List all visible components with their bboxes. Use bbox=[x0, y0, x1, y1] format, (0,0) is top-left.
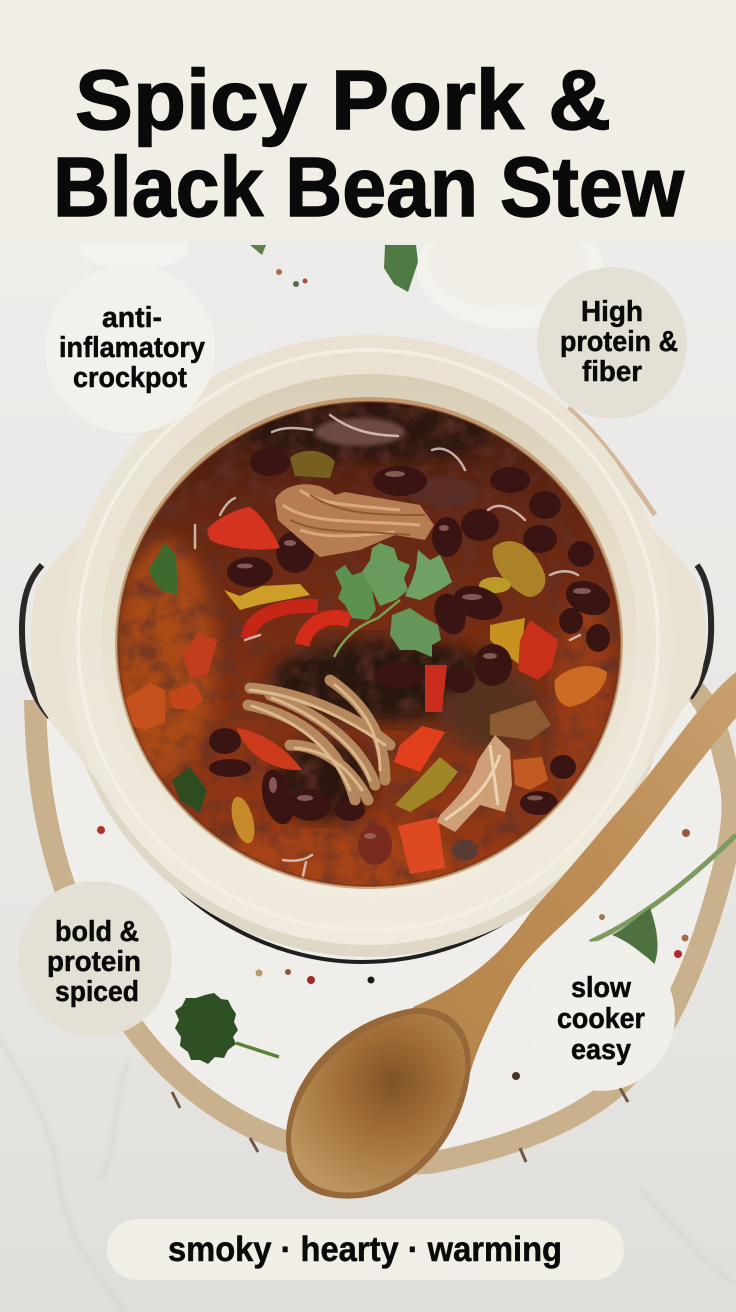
glossy sauce pools bbox=[315, 418, 405, 446]
sauce colour fields bbox=[115, 540, 215, 780]
crockpot bbox=[22, 335, 711, 962]
rim bbox=[63, 335, 673, 945]
shredded pork upper bbox=[275, 484, 434, 557]
badge: slow cooker easy: slow bbox=[571, 972, 631, 1004]
badge: high protein and fiber: fiber bbox=[582, 356, 642, 388]
title line 2: Black Bean Stew bbox=[53, 140, 685, 234]
shredded pork lower bbox=[248, 680, 390, 800]
green herbs in stew bbox=[148, 543, 178, 595]
badge: anti-inflamatory crockpot: anti- bbox=[102, 302, 162, 334]
title banner bbox=[0, 0, 736, 242]
top olive pepper chunk bbox=[290, 451, 335, 478]
title line 1: Spicy Pork & bbox=[75, 53, 611, 147]
tagline pill: smoky · hearty · warming bbox=[168, 1230, 562, 1269]
peppercorns on board bbox=[97, 826, 690, 1080]
stew bbox=[115, 400, 620, 890]
sauce glints bbox=[195, 415, 580, 880]
badge: bold and protein spiced bbox=[18, 881, 172, 1037]
bean highlights bbox=[237, 471, 591, 839]
green herb stem bbox=[590, 835, 736, 965]
cilantro garnish bbox=[334, 543, 452, 657]
badge: high protein and fiber bbox=[537, 267, 687, 419]
lower body bbox=[63, 347, 673, 957]
shredded pork right bbox=[437, 735, 512, 832]
badge: slow cooker easy: easy bbox=[571, 1034, 631, 1066]
badge: bold and protein spiced: bold & bbox=[55, 916, 139, 948]
tagline pill bbox=[107, 1219, 624, 1280]
badge: bold and protein spiced: protein bbox=[47, 946, 141, 978]
top props: bowls and plate bbox=[0, 207, 603, 329]
orange chunks bbox=[124, 683, 165, 730]
wooden board bbox=[24, 408, 736, 1174]
badge: slow cooker easy: cooker bbox=[557, 1003, 645, 1035]
badge: anti-inflamatory crockpot bbox=[45, 265, 215, 433]
cilantro sprig on board bbox=[175, 993, 279, 1064]
badge: anti-inflamatory crockpot: crockpot bbox=[73, 362, 187, 394]
badge: high protein and fiber: High bbox=[581, 296, 643, 328]
wooden spoon bbox=[286, 672, 736, 1199]
badge: high protein and fiber: protein & bbox=[560, 326, 678, 358]
beans bbox=[209, 448, 615, 865]
yellow pepper chunks bbox=[493, 541, 545, 597]
mottled sauce texture bbox=[118, 402, 620, 886]
stew rim shadow bbox=[118, 402, 620, 886]
inner wall bbox=[101, 374, 637, 898]
handles bbox=[31, 525, 100, 785]
badge: slow cooker easy bbox=[527, 941, 675, 1091]
black handle trims bbox=[22, 565, 50, 717]
black base line bbox=[136, 838, 590, 962]
badge: bold and protein spiced: spiced bbox=[55, 976, 139, 1008]
red peppers bbox=[207, 507, 558, 874]
badge: anti-inflamatory crockpot: inflamatory bbox=[59, 332, 205, 364]
